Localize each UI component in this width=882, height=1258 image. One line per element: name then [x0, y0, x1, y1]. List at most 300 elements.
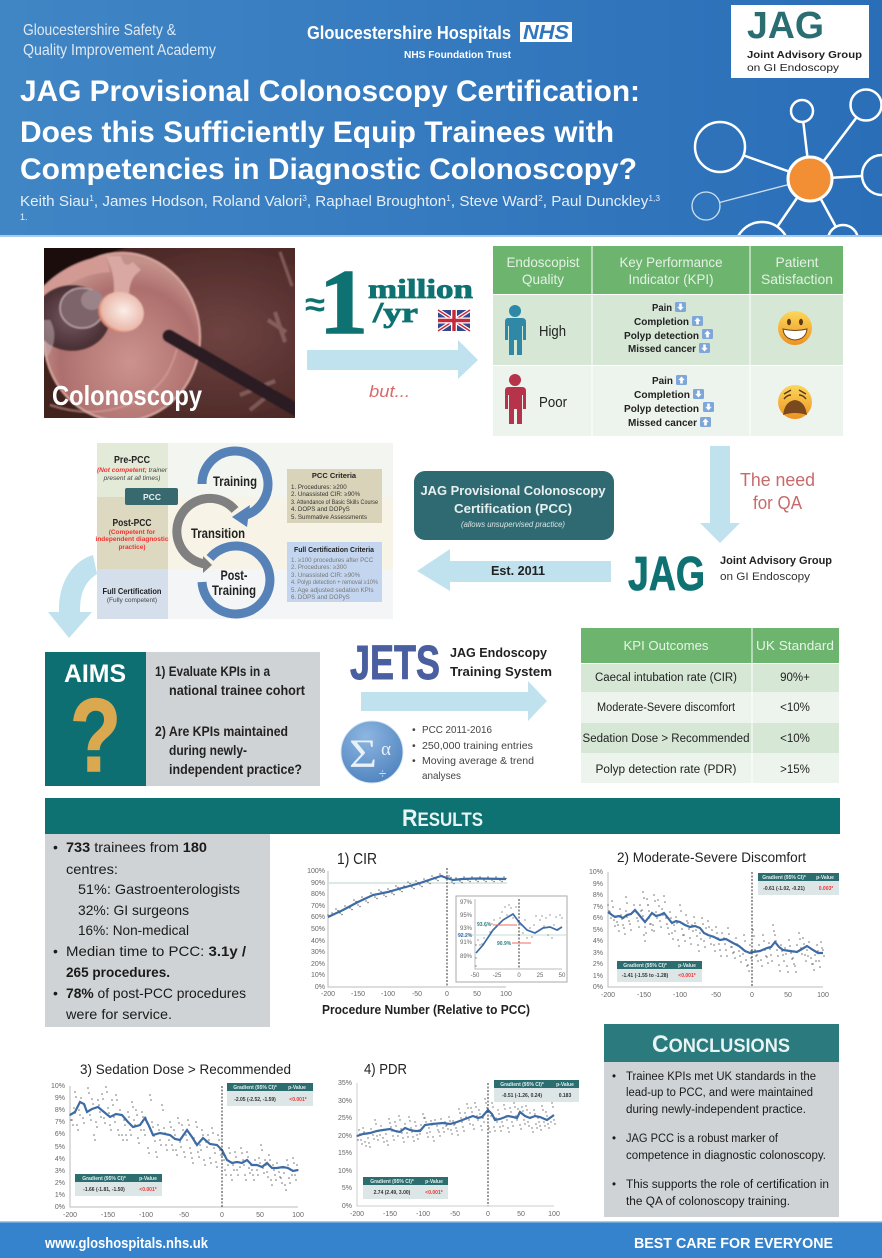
- gradient table: post-PCC: 0.183: [559, 1093, 571, 1099]
- axis ticks: -50: [179, 1212, 189, 1219]
- aims text: 1) Evaluate KPIs in a: [155, 664, 270, 679]
- axis ticks: 100%: [307, 868, 325, 875]
- axis ticks: 40%: [311, 938, 325, 945]
- PCC criteria box: [287, 469, 382, 523]
- KPI list: [624, 375, 714, 429]
- inset chart: 90.9%: [497, 941, 512, 947]
- table header: [506, 254, 833, 287]
- table rows: 90%+: [780, 672, 810, 684]
- conclusions text: •: [612, 1133, 616, 1145]
- inset chart: [456, 896, 567, 982]
- axis ticks: 6%: [55, 1131, 65, 1138]
- authors: , Steve Ward: [451, 194, 538, 210]
- KPI list: [624, 302, 713, 355]
- table rows: Polyp detection rate (PDR): [596, 764, 737, 776]
- stage labels: (Fully competent): [107, 597, 157, 604]
- arrow: left with Est. 2011: Est. 2011: [491, 564, 545, 578]
- axis ticks: [589, 869, 829, 999]
- panel: endoscopist quality table: [493, 246, 843, 436]
- the need for QA: [740, 470, 815, 513]
- JAG logo lower: Joint Advisory Group: [720, 555, 832, 567]
- full certification criteria box: 4. Polyp detection + removal ≥10%: [291, 579, 378, 586]
- axis ticks: 7%: [55, 1119, 65, 1126]
- table rows: <10%: [780, 733, 810, 745]
- conclusions text: This supports the role of certification in: [626, 1179, 829, 1191]
- axis ticks: 1%: [55, 1192, 65, 1199]
- conclusions text: •: [612, 1071, 616, 1083]
- PCC marker: [125, 488, 178, 505]
- full certification criteria box: 3. Unassisted CIR: ≥90%: [291, 572, 361, 579]
- inset chart: 25: [537, 973, 544, 979]
- axis ticks: 30%: [311, 949, 325, 956]
- KPI list: Completion: [634, 390, 690, 401]
- inset chart: -50: [471, 973, 480, 979]
- panel: KPI outcomes table: [581, 628, 839, 783]
- axis ticks: 50: [473, 991, 481, 998]
- icon: red person: [505, 374, 526, 424]
- full certification criteria box: 5. Age adjusted sedation KPIs: [291, 587, 374, 594]
- PCC criteria box: PCC Criteria: [312, 471, 357, 480]
- gradient table: pre-PCC: [75, 1174, 162, 1196]
- panel: results summary: 733 trainees from 180: [66, 839, 207, 855]
- aims text: [155, 664, 305, 777]
- table rows: Moderate-Severe discomfort: [597, 702, 736, 714]
- statistic: 1 million per year: /yr: [372, 298, 418, 329]
- axis ticks: [51, 1083, 304, 1219]
- axis ticks: 60%: [311, 914, 325, 921]
- the need for QA: for QA: [753, 493, 802, 513]
- conclusions heading: CONCLUSIONS: [652, 1031, 790, 1058]
- axis ticks: -150: [101, 1212, 115, 1219]
- JETS logo: Training System: [450, 664, 552, 679]
- gradient table: pre-PCC: -1.66 (-1.81, -1.50): [83, 1187, 125, 1193]
- axis ticks: [307, 868, 512, 998]
- inset chart: -25: [493, 973, 502, 979]
- panel: results summary: 16%: Non-medical: [78, 922, 189, 938]
- stage labels: (Not competent; trainer: [97, 467, 168, 474]
- panel: results summary: [45, 834, 270, 1027]
- axis ticks: 15%: [338, 1150, 352, 1157]
- JAG logo box: JAG: [747, 5, 824, 47]
- KPI list: Pain: [652, 303, 672, 314]
- cycle labels: Training: [213, 473, 257, 489]
- gradient table: post-PCC: -0.61 (-1.02, -0.21): [763, 886, 805, 892]
- icon: teal person: [505, 305, 526, 355]
- axis ticks: 50: [784, 992, 792, 999]
- arrow: left with Est. 2011: [417, 549, 611, 591]
- KPI list: Polyp detection: [624, 404, 699, 415]
- callout: JAG PCC: (allows unsupervised practice): [461, 519, 565, 529]
- stage labels: present at all times): [103, 475, 160, 482]
- JAG logo lower: [628, 548, 832, 601]
- JETS bullet list: •: [412, 724, 416, 736]
- JAG logo box: Joint Advisory Group: [747, 49, 862, 61]
- inset chart: 95%: [460, 913, 473, 919]
- statistic: 1 million per year: ≈: [305, 286, 325, 324]
- gradient table: post-PCC: 0.003*: [819, 886, 833, 892]
- axis ticks: -200: [350, 1211, 364, 1218]
- authors: 1: [446, 194, 451, 203]
- axis ticks: 30%: [338, 1098, 352, 1105]
- JETS bullet list: •: [412, 740, 416, 752]
- chart 4: PDR: [338, 1061, 579, 1218]
- aims text: during newly-: [169, 743, 247, 758]
- cycle labels: Training: [212, 582, 256, 598]
- network icon: [691, 88, 882, 235]
- panel: results summary: •: [53, 943, 58, 959]
- panel: results summary: were for service.: [65, 1006, 172, 1022]
- axis ticks: 100: [817, 992, 829, 999]
- stage labels: (Competent for: [109, 529, 156, 536]
- axis ticks: -150: [351, 991, 365, 998]
- gradient table: pre-PCC: <0.001*: [425, 1190, 443, 1196]
- axis ticks: -50: [450, 1211, 460, 1218]
- gradient table: pre-PCC: p-Value: [425, 1179, 443, 1185]
- axis ticks: 1%: [593, 973, 603, 980]
- KPI list: Missed cancer: [628, 418, 697, 429]
- axis ticks: 0: [445, 991, 449, 998]
- JETS logo: JETS: [350, 637, 440, 690]
- table header: KPI Outcomes: [624, 638, 709, 653]
- axis ticks: 10%: [589, 869, 603, 876]
- authors: Keith Siau: [20, 194, 86, 210]
- icon: statistics circle: α: [381, 739, 391, 760]
- gradient table: pre-PCC: [363, 1177, 448, 1199]
- chart title: 4) PDR: [364, 1061, 407, 1078]
- panel: certification pathway diagram: [96, 443, 393, 619]
- JAG logo box: on GI Endoscopy: [747, 62, 840, 74]
- gradient table: pre-PCC: Gradient (95% CI)*: [82, 1176, 126, 1182]
- PCC marker: PCC: [143, 492, 161, 502]
- axis ticks: -50: [711, 992, 721, 999]
- gradient table: pre-PCC: <0.001*: [139, 1187, 157, 1193]
- table header: Satisfaction: [761, 271, 833, 287]
- axis ticks: -200: [63, 1212, 77, 1219]
- footer: BEST CARE FOR EVERYONE: [634, 1236, 833, 1252]
- full certification criteria box: 1. ≥100 procedures after PCC: [291, 557, 374, 564]
- axis ticks: 100: [548, 1211, 560, 1218]
- authors: , Raphael Broughton: [307, 194, 446, 210]
- gradient table: post-PCC: p-Value: [556, 1082, 574, 1088]
- icon: statistics circle: ÷: [379, 766, 386, 781]
- inset chart: 92.2%: [458, 933, 473, 939]
- title: Does this Sufficiently Equip Trainees with: [20, 116, 614, 149]
- results heading: [45, 798, 840, 834]
- conclusions text: Trainee KPIs met UK standards in the: [626, 1071, 816, 1083]
- table header: Key Performance: [620, 254, 723, 270]
- inset chart: 89%: [460, 954, 473, 960]
- callout: JAG PCC: Certification (PCC): [454, 501, 572, 516]
- axis ticks: -150: [637, 992, 651, 999]
- PCC criteria box: 5. Summative Assessments: [291, 514, 367, 521]
- axis ticks: 100: [292, 1212, 304, 1219]
- gradient table: pre-PCC: <0.001*: [678, 973, 696, 979]
- axis ticks: 35%: [338, 1080, 352, 1087]
- axis ticks: -200: [601, 992, 615, 999]
- photo label: Colonoscopy: [52, 380, 202, 411]
- panel: results summary: Median time to PCC: 3.1y /: [66, 943, 246, 959]
- row: poor quality: [505, 374, 812, 429]
- panel: results summary: centres:: [66, 861, 118, 877]
- axis ticks: 70%: [311, 903, 325, 910]
- statistic: 1 million per year: 1: [319, 251, 368, 353]
- chart 1: CIR: [307, 851, 567, 1017]
- table rows: <10%: [780, 702, 810, 714]
- inset chart: 93%: [460, 926, 473, 932]
- JETS bullet list: [412, 724, 534, 782]
- inset chart: 97%: [460, 900, 473, 906]
- gradient table: post-PCC: p-Value: [816, 875, 834, 881]
- gradient table: pre-PCC: Gradient (95% CI)*: [370, 1179, 414, 1185]
- trust logo: NHS: [523, 22, 570, 44]
- chart 3: sedation dose: [51, 1061, 313, 1219]
- axis ticks: 100: [500, 991, 512, 998]
- JETS bullet list: Moving average & trend: [422, 755, 534, 767]
- axis ticks: 0%: [342, 1203, 352, 1210]
- table header: Indicator (KPI): [628, 271, 714, 287]
- inset chart: 91%: [460, 940, 473, 946]
- inset chart: 50: [559, 973, 566, 979]
- axis ticks: 5%: [342, 1185, 352, 1192]
- axis ticks: 0: [750, 992, 754, 999]
- conclusions text: lead-up to PCC, and were maintained: [626, 1087, 813, 1099]
- authors: 1.: [20, 212, 28, 222]
- conclusions text: JAG PCC is a robust marker of: [626, 1133, 779, 1145]
- gradient table: post-PCC: Gradient (95% CI)*: [233, 1085, 277, 1091]
- icon: UK flag: [438, 310, 470, 331]
- trust logo: NHS Foundation Trust: [404, 49, 511, 61]
- inset chart: 93.6%: [477, 922, 492, 928]
- footer: [0, 1221, 882, 1258]
- panel: results summary: •: [53, 985, 58, 1001]
- arrow: to KPI table: [307, 340, 478, 379]
- gradient table: pre-PCC: -1.41 (-1.55 to -1.28): [622, 973, 669, 979]
- table header: Quality: [522, 271, 564, 287]
- stage labels: Pre-PCC: [114, 454, 150, 466]
- axis ticks: 0%: [593, 984, 603, 991]
- axis ticks: 7%: [593, 904, 603, 911]
- authors: , James Hodson, Roland Valori: [94, 194, 302, 210]
- axis ticks: 4%: [55, 1156, 65, 1163]
- axis ticks: 9%: [593, 881, 603, 888]
- table header: [624, 638, 834, 653]
- gradient table: post-PCC: p-Value: [288, 1085, 306, 1091]
- table rows: >15%: [780, 764, 810, 776]
- aims text: 2) Are KPIs maintained: [155, 724, 288, 739]
- axis ticks: 3%: [55, 1168, 65, 1175]
- table header: UK Standard: [756, 638, 834, 653]
- authors: , Paul Dunckley: [543, 194, 649, 210]
- KPI list: Polyp detection: [624, 331, 699, 342]
- row: high quality: [505, 302, 812, 355]
- axis ticks: 0%: [55, 1204, 65, 1211]
- authors: 3: [302, 194, 307, 203]
- gradient table: post-PCC: [758, 873, 839, 895]
- panel: results summary: 32%: GI surgeons: [78, 902, 189, 918]
- table rows: [582, 672, 810, 776]
- icon: weary emoji: [778, 385, 812, 419]
- stage labels: Post-PCC: [112, 517, 152, 529]
- full certification criteria box: 6. DOPS and DOPyS: [291, 594, 350, 601]
- stage labels: independent diagnostic: [96, 536, 169, 543]
- axis ticks: -100: [416, 1211, 430, 1218]
- JETS bullet list: •: [412, 755, 416, 767]
- conclusions text: during newly-independent practice.: [626, 1104, 806, 1116]
- axis ticks: 4%: [593, 938, 603, 945]
- gradient table: post-PCC: Gradient (95% CI)*: [500, 1082, 544, 1088]
- cycle labels: Post-: [220, 567, 248, 583]
- gradient table: pre-PCC: Gradient (95% CI)*: [623, 963, 667, 969]
- gradient table: post-PCC: -0.51 (-1.26, 0.24): [502, 1093, 542, 1099]
- axis ticks: -200: [321, 991, 335, 998]
- axis ticks: 6%: [593, 915, 603, 922]
- panel: results summary: 78% of post-PCC procedures: [66, 985, 246, 1001]
- full certification criteria box: 2. Procedures: ≥300: [291, 564, 347, 571]
- academy logo: [23, 22, 216, 59]
- axis ticks: 2%: [55, 1180, 65, 1187]
- cycle labels: [191, 473, 257, 598]
- callout: JAG PCC: [414, 471, 614, 540]
- icon: statistics circle: [341, 721, 403, 783]
- axis ticks: 8%: [55, 1107, 65, 1114]
- gradient table: post-PCC: -2.05 (-2.52, -1.59): [234, 1097, 276, 1103]
- full certification criteria box: [287, 542, 382, 602]
- PCC criteria box: 2. Unassisted CIR: ≥90%: [291, 491, 361, 498]
- axis ticks: 10%: [338, 1168, 352, 1175]
- axis ticks: 2%: [593, 961, 603, 968]
- JETS bullet list: PCC 2011-2016: [422, 724, 492, 736]
- panel: results summary: 51%: Gastroenterologists: [78, 881, 240, 897]
- axis ticks: 8%: [593, 892, 603, 899]
- arrow: down to JAG: [700, 446, 740, 543]
- table header: Patient: [776, 254, 819, 270]
- JETS bullet list: analyses: [422, 770, 461, 782]
- title: Competencies in Diagnostic Colonoscopy?: [20, 153, 637, 186]
- gradient table: post-PCC: [494, 1080, 579, 1102]
- stage labels: [96, 454, 169, 604]
- axis ticks: [338, 1080, 560, 1218]
- panel: aims: [45, 652, 320, 794]
- panel: results summary: •: [53, 839, 58, 855]
- icon: question mark: ?: [70, 678, 121, 794]
- trust logo: [307, 22, 572, 61]
- JETS bullet list: 250,000 training entries: [422, 740, 533, 752]
- conclusions text: •: [612, 1179, 616, 1191]
- row: poor quality: Poor: [539, 395, 567, 411]
- chart 2: moderate-severe discomfort: [589, 849, 839, 999]
- PCC criteria box: 1. Procedures: ≥200: [291, 484, 347, 491]
- authors: 1,3: [648, 194, 661, 203]
- axis ticks: 50: [256, 1212, 264, 1219]
- axis ticks: 0: [486, 1211, 490, 1218]
- title: [20, 75, 640, 186]
- gradient table: post-PCC: <0.001*: [289, 1097, 307, 1103]
- conclusions text: [612, 1071, 829, 1208]
- axis ticks: 20%: [311, 961, 325, 968]
- statistic: 1 million per year: [305, 251, 473, 353]
- footer: www.gloshospitals.nhs.uk: [44, 1236, 209, 1252]
- axis ticks: 10%: [311, 972, 325, 979]
- axis ticks: 50%: [311, 926, 325, 933]
- axis ticks: 25%: [338, 1115, 352, 1122]
- axis ticks: -50: [412, 991, 422, 998]
- axis ticks: -100: [381, 991, 395, 998]
- authors: 1: [89, 194, 94, 203]
- axis ticks: 3%: [593, 950, 603, 957]
- axis ticks: 10%: [51, 1083, 65, 1090]
- gradient table: pre-PCC: p-Value: [678, 963, 696, 969]
- axis ticks: -150: [383, 1211, 397, 1218]
- panel: results summary: 265 procedures.: [66, 964, 170, 980]
- chart title: 3) Sedation Dose > Recommended: [80, 1061, 291, 1077]
- gradient table: post-PCC: [227, 1083, 313, 1106]
- axis ticks: 0%: [315, 984, 325, 991]
- axis ticks: 9%: [55, 1095, 65, 1102]
- gradient table: pre-PCC: [617, 961, 702, 982]
- KPI list: Completion: [634, 317, 689, 328]
- gradient table: pre-PCC: p-Value: [139, 1176, 157, 1182]
- axis ticks: 5%: [593, 927, 603, 934]
- stage labels: Full Certification: [102, 586, 162, 596]
- conclusions text: competence in diagnostic colonoscopy.: [626, 1150, 826, 1162]
- JAG logo lower: JAG: [628, 548, 705, 601]
- axis ticks: 0: [220, 1212, 224, 1219]
- gradient table: post-PCC: Gradient (95% CI)*: [762, 875, 806, 881]
- statistic: 1 million per year: million: [368, 274, 473, 304]
- axis label: Procedure Number (Relative to PCC): [322, 1002, 530, 1017]
- cycle labels: Transition: [191, 525, 245, 541]
- JETS logo: [350, 637, 552, 690]
- JAG logo lower: on GI Endoscopy: [720, 571, 811, 583]
- table rows: Caecal intubation rate (CIR): [595, 672, 737, 684]
- axis ticks: 50: [517, 1211, 525, 1218]
- KPI list: Pain: [652, 376, 673, 387]
- chart title: 1) CIR: [337, 851, 377, 868]
- title: JAG Provisional Colonoscopy Certification:: [20, 75, 640, 108]
- axis ticks: 90%: [311, 880, 325, 887]
- panel: aims: AIMS: [64, 660, 126, 688]
- the need for QA: The need: [740, 470, 815, 490]
- aims text: national trainee cohort: [169, 683, 305, 698]
- but text: but...: [369, 382, 410, 401]
- PCC criteria box: 4. DOPS and DOPyS: [291, 506, 350, 513]
- inset chart: 0: [517, 973, 521, 979]
- row: high quality: High: [539, 324, 566, 340]
- aims text: independent practice?: [169, 762, 302, 777]
- table rows: Sedation Dose > Recommended: [582, 733, 750, 745]
- arrow: to KPI outcomes: [361, 681, 547, 721]
- callout: JAG PCC: JAG Provisional Colonoscopy: [420, 483, 606, 498]
- axis ticks: -100: [673, 992, 687, 999]
- axis ticks: 80%: [311, 891, 325, 898]
- stage labels: practice): [118, 544, 146, 551]
- conclusions text: the QA of colonoscopy training.: [626, 1196, 790, 1208]
- axis ticks: 20%: [338, 1133, 352, 1140]
- axis ticks: 5%: [55, 1144, 65, 1151]
- authors: 2: [538, 194, 543, 203]
- header banner: [0, 0, 882, 237]
- trust logo: Gloucestershire Hospitals: [307, 23, 511, 43]
- academy logo: Quality Improvement Academy: [23, 42, 216, 59]
- JAG logo box: [731, 5, 869, 78]
- full certification criteria box: Full Certification Criteria: [294, 545, 375, 554]
- training cycle arrows: [177, 451, 270, 614]
- academy logo: Gloucestershire Safety &: [23, 22, 176, 39]
- table header: Endoscopist: [506, 254, 580, 270]
- gradient table: pre-PCC: 2.74 (2.49, 3.00): [374, 1190, 411, 1196]
- chart title: 2) Moderate-Severe Discomfort: [617, 849, 806, 865]
- KPI list: Missed cancer: [628, 344, 696, 355]
